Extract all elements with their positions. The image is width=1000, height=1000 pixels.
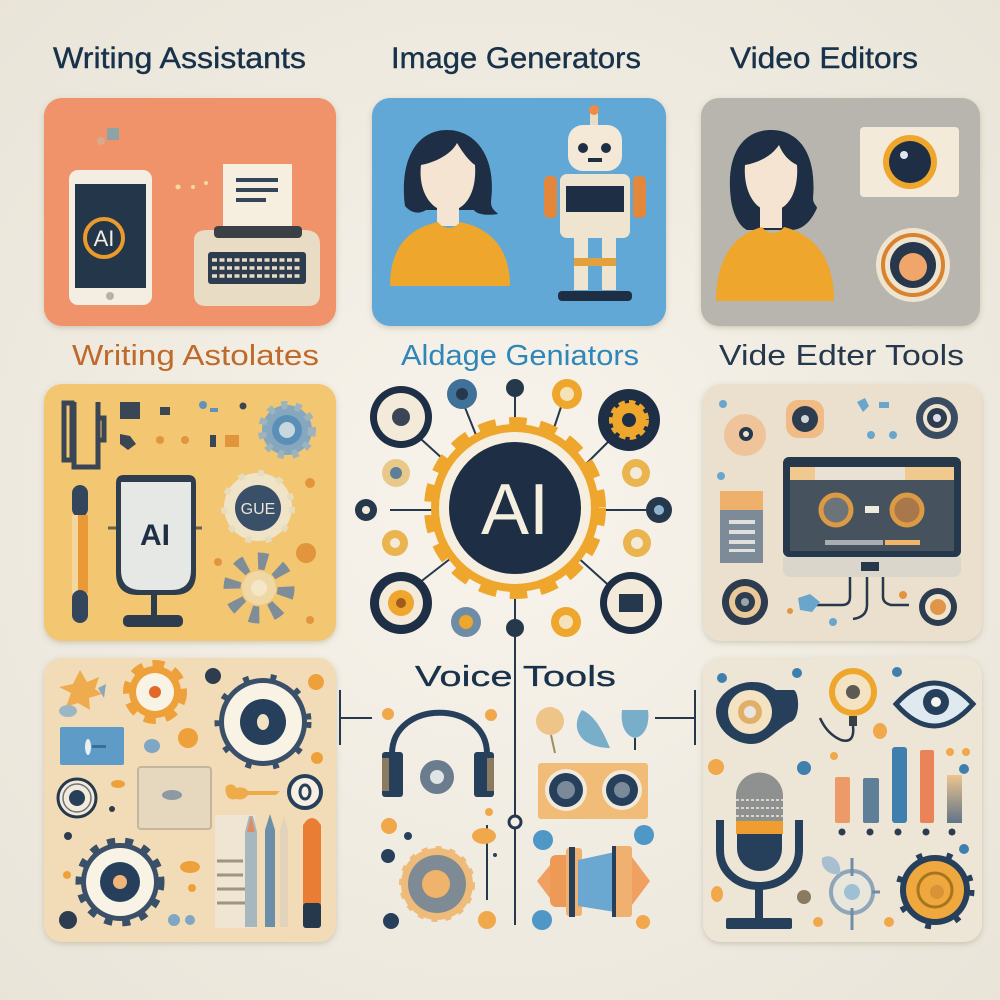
heading: Image Generators: Image Generators (391, 42, 641, 75)
panel: gears and tools (44, 658, 336, 942)
icon: AI tablet (69, 170, 152, 305)
voice tools icons (381, 707, 654, 930)
decorative specks (381, 708, 650, 929)
icon: large dark gear (217, 676, 309, 768)
icon: robot (544, 105, 646, 301)
icon: sun gear (232, 561, 286, 615)
heading: Voice Tools: Voice Tools (415, 661, 616, 693)
decorative sparks (97, 128, 208, 190)
panel: video editors illustration (701, 98, 980, 326)
label: Aldage Geniators: Aldage Geniators (401, 340, 639, 372)
icon: leaves (536, 707, 648, 753)
icon: speaker (538, 763, 648, 819)
heading: Video Editors: Video Editors (730, 42, 918, 75)
icon: ring right (289, 776, 321, 808)
connector lines (340, 385, 695, 925)
icon: document card (720, 491, 763, 563)
icon: top reels (724, 397, 958, 456)
icon: orange gear (129, 666, 181, 718)
icon: microphone (720, 772, 799, 929)
decorative scraps (120, 402, 246, 450)
icon: dark camera eye (716, 682, 798, 744)
icon: camera lens card (860, 127, 959, 197)
icon: dark gear badge (224, 473, 292, 541)
icon: dumbbell sound wave (537, 846, 650, 917)
gear node upper left (370, 386, 432, 448)
panel: writing tools (44, 384, 336, 641)
icon: headphones (382, 713, 494, 797)
gear node lower right (600, 572, 662, 634)
icon: lower gear (79, 841, 161, 923)
panel: image generators illustration (372, 98, 666, 326)
center gear with AI: AI (481, 470, 549, 550)
icon: star flower (59, 670, 106, 717)
icon: pencils and notes (215, 814, 321, 928)
icon: blue gear (262, 405, 312, 455)
icon: crosshair dial (822, 856, 880, 930)
icon: blue tag (60, 727, 124, 765)
label: Writing Astolates: Writing Astolates (72, 340, 319, 372)
icon: woman portrait (716, 130, 834, 301)
icon: ring on line (509, 816, 521, 828)
icon: key (225, 784, 280, 800)
small nodes (355, 379, 672, 637)
decorative specks (63, 674, 324, 892)
center gear with AI (431, 424, 599, 592)
panel: writing assistants illustration (44, 98, 336, 326)
heading: Writing Assistants: Writing Assistants (53, 42, 306, 75)
decorative specks (708, 723, 970, 927)
icon: bottom gear (401, 848, 473, 920)
label: Vide Edter Tools: Vide Edter Tools (719, 340, 964, 372)
icon: beige card (138, 767, 211, 829)
icon: stick with dot (486, 825, 488, 900)
icon: holder (64, 402, 104, 467)
icon: small lens on stand (820, 668, 877, 741)
decorative specks (717, 398, 897, 626)
gear node upper right (598, 389, 660, 451)
icon: AI screen on stand (108, 475, 202, 627)
icon: AI tablet: AI (94, 226, 114, 251)
icon: pen (72, 485, 88, 623)
icon: monitor with timeline (783, 457, 961, 619)
icon: ring left (58, 779, 96, 817)
icon: woman portrait (390, 130, 510, 286)
icon: round lens (876, 228, 950, 302)
icon: eye (896, 683, 973, 726)
gear node lower left (370, 572, 432, 634)
icon: typewriter (194, 164, 320, 306)
panel: video editor tools (703, 384, 982, 641)
central AI hub diagram (340, 379, 695, 925)
chart: equalizer bars (835, 747, 962, 836)
icon: orange spiral gear (898, 853, 972, 927)
icon: AI screen on stand: AI (140, 519, 170, 552)
panel: voice and vision (703, 658, 982, 942)
icon: bottom reels (722, 579, 957, 626)
icon: dark gear badge: GUE (241, 501, 275, 518)
